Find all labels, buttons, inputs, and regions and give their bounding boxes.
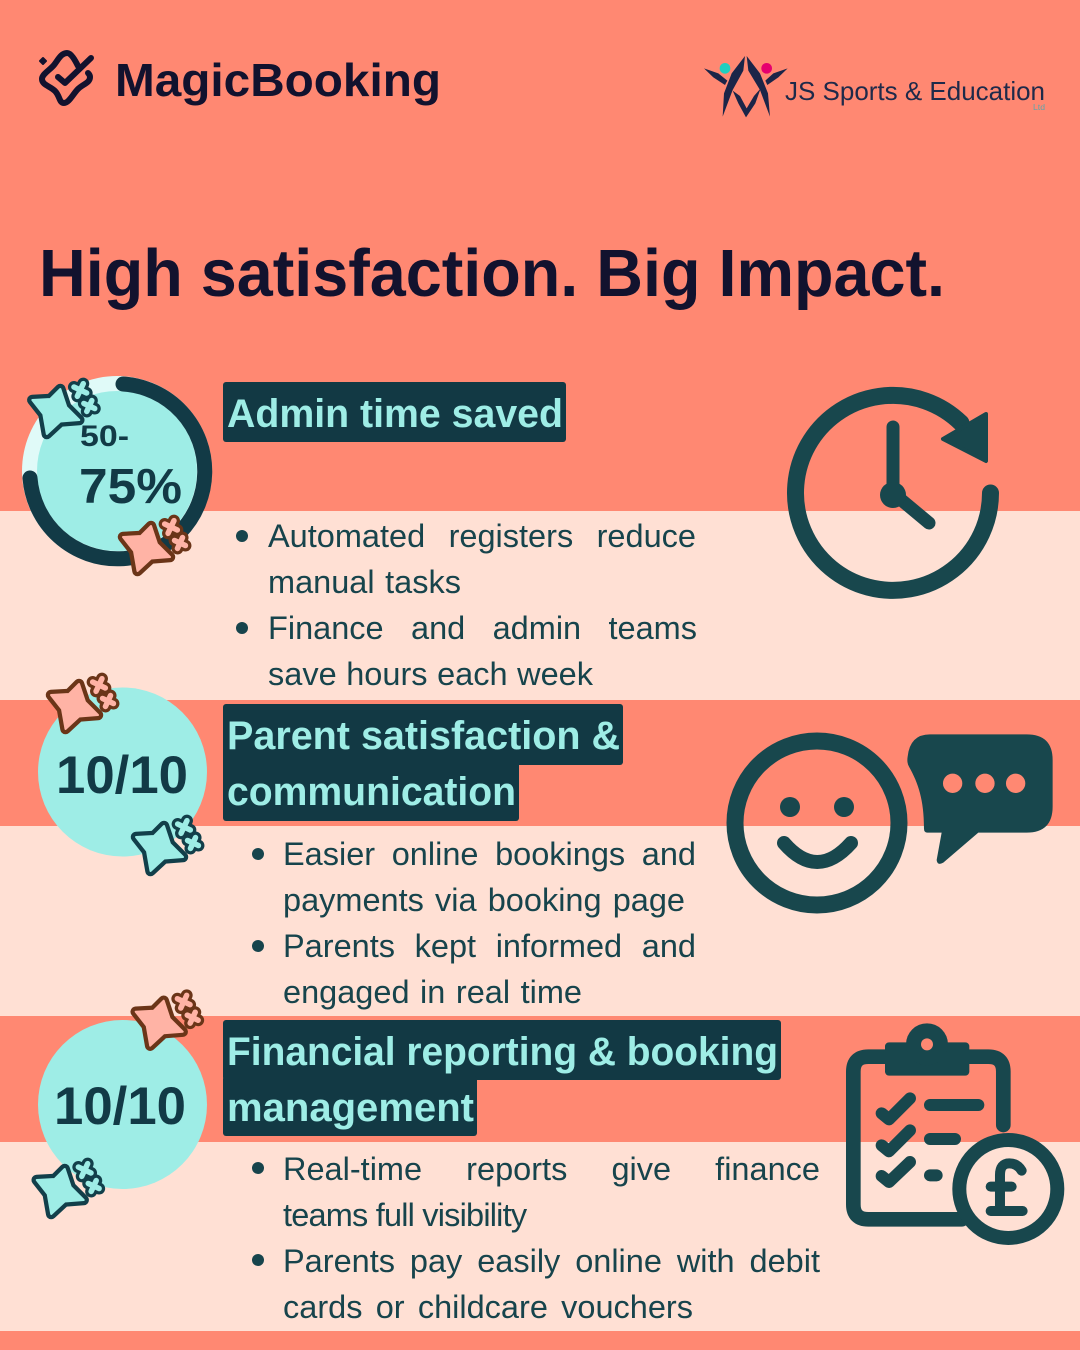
sparkle star peach: [136, 992, 201, 1046]
heading: Parent satisfaction & communication: communication: [227, 770, 516, 814]
progress ring: 50-75%: [22, 376, 212, 566]
bullet list: admin time saved: save hours each week: [268, 656, 593, 692]
suffix: Ltd: [1033, 103, 1045, 112]
bullet list: financial reporting: teams full visibility: [283, 1197, 526, 1233]
icon: clipboard with pound: [853, 1023, 1057, 1238]
icon: clock: [796, 395, 990, 590]
heading: Parent satisfaction & communication: [223, 704, 623, 821]
bullet list: financial reporting: [252, 1151, 820, 1325]
bullet list: parent satisfaction: Easier online bookings and: [283, 836, 696, 872]
sparkle star teal: [32, 381, 97, 434]
heading: Financial reporting & booking management: Financial reporting & booking: [227, 1030, 778, 1074]
stat circle: financial reporting: [38, 1020, 207, 1189]
bullet list: admin time saved: Automated registers reduce: [268, 518, 696, 554]
stat value: 75%: [79, 460, 182, 514]
bullet list: parent satisfaction: [252, 836, 696, 1010]
sparkle star peach: [123, 518, 188, 571]
bullet list: financial reporting: cards or childcare vouchers: [283, 1289, 693, 1325]
wordmark: MagicBooking: [115, 54, 441, 106]
bullet list: admin time saved: Finance and admin teams: [268, 610, 697, 646]
bullet list: financial reporting: Parents pay easily online with debit: [283, 1243, 820, 1279]
sparkle star teal: [37, 1161, 102, 1214]
heading: Financial reporting & booking management: [223, 1020, 781, 1136]
MagicBooking logo: [40, 53, 441, 106]
heading: Admin time saved: Admin time saved: [227, 392, 563, 436]
bullet list: parent satisfaction: payments via booking page: [283, 882, 685, 918]
bullet list: parent satisfaction: engaged in real time: [283, 974, 582, 1010]
company name: JS Sports & Education: [785, 76, 1045, 106]
sparkle star teal: [136, 818, 201, 871]
stat circle: parent satisfaction: 10/10: [56, 746, 188, 805]
heading: Financial reporting & booking management: management: [227, 1086, 474, 1130]
icon: smiley face: [735, 741, 899, 905]
heading: Parent satisfaction & communication: Parent satisfaction &: [227, 714, 620, 758]
stat circle: parent satisfaction: [38, 688, 207, 856]
icon: speech bubble: [907, 734, 1053, 864]
icon: MagicBooking mark: [40, 53, 91, 103]
bullet list: financial reporting: Real-time reports give finance: [283, 1151, 820, 1187]
stat circle: financial reporting: 10/10: [54, 1077, 186, 1136]
bullet list: parent satisfaction: Parents kept informed and: [283, 928, 696, 964]
stat label: 50-: [80, 420, 129, 453]
JS Sports & Education logo: [704, 56, 1045, 117]
sparkle star peach: [51, 676, 116, 729]
icon: JS figures: [704, 56, 788, 117]
title: High satisfaction. Big Impact.: [39, 236, 945, 311]
bullet list: admin time saved: manual tasks: [268, 564, 461, 600]
bullet list: admin time saved: [236, 518, 697, 692]
